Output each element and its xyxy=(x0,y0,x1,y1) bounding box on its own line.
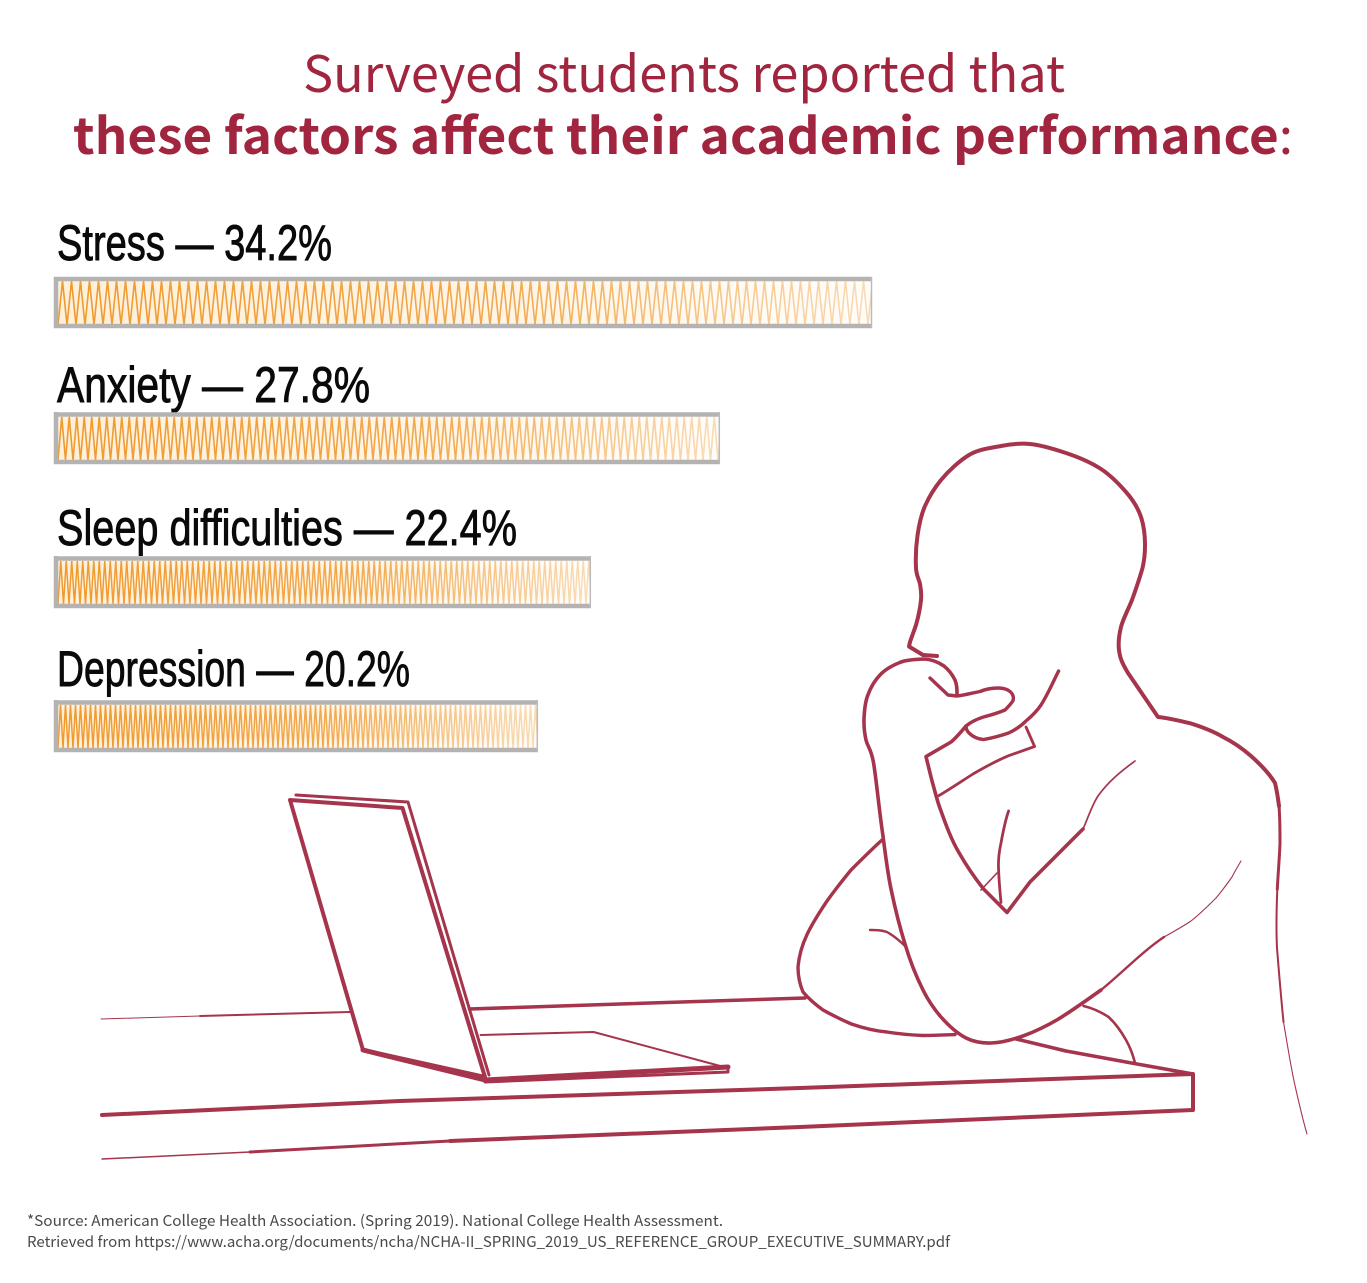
armpit line xyxy=(870,930,905,946)
bar: anxiety xyxy=(54,412,720,464)
chest and forearm contour xyxy=(926,726,1083,912)
label: anxiety: Anxiety — 27.8% xyxy=(57,357,370,413)
source note: *Source: American College Health Association. (Spring 2019). National College Health Assessment. xyxy=(27,1210,723,1231)
label: sleep difficulties: Sleep difficulties — 22.4% xyxy=(57,500,517,556)
title xyxy=(73,35,1293,169)
left arm outline xyxy=(798,840,955,1036)
right elbow line xyxy=(1084,1006,1135,1063)
label: stress: Stress — 34.2% xyxy=(57,215,332,271)
bar: sleep difficulties xyxy=(54,556,591,608)
source note xyxy=(27,1210,951,1252)
source note: Retrieved from https://www.acha.org/documents/ncha/NCHA-II_SPRING_2019_US_REFERENCE_GROUP_EXECUTIVE_SUMMARY.pdf xyxy=(27,1231,951,1252)
small crease xyxy=(981,873,997,890)
bar group: sleep difficulties 22.4% xyxy=(54,500,591,608)
illustration: student xyxy=(798,444,1307,1134)
raised arm outline xyxy=(864,659,1101,1043)
illustration: desk xyxy=(101,998,1193,1159)
bar: stress xyxy=(54,277,872,328)
bar group: stress 34.2% xyxy=(54,215,872,328)
illustration: laptop xyxy=(290,795,728,1082)
neckline crease xyxy=(998,811,1009,902)
bar group: anxiety 27.8% xyxy=(54,357,720,464)
head, neck and back outline xyxy=(909,444,1279,806)
collar xyxy=(939,727,1035,796)
hand and fingers xyxy=(930,671,1059,740)
label: depression: Depression — 20.2% xyxy=(57,641,410,697)
bar group: depression 20.2% xyxy=(54,641,538,752)
title: these factors affect their academic performance : xyxy=(73,97,1293,169)
title: Surveyed students reported that xyxy=(303,35,1065,107)
bar: depression xyxy=(54,700,538,752)
